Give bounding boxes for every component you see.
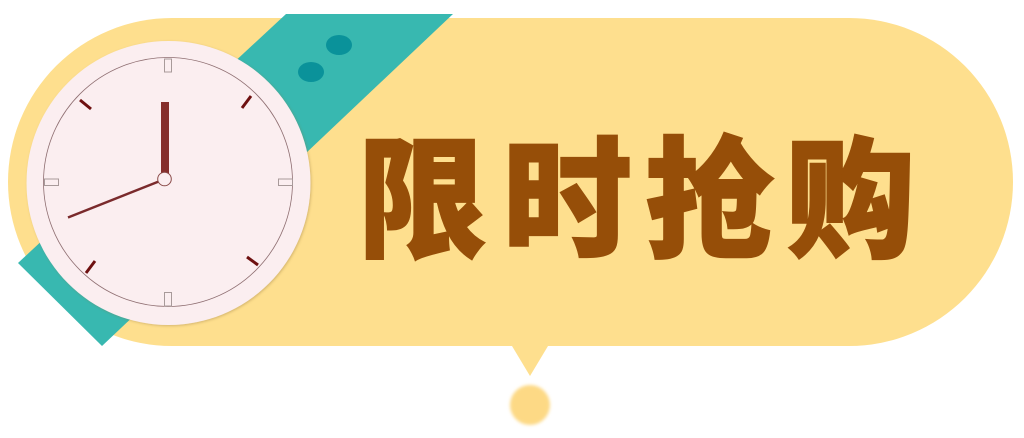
title: 限	[358, 128, 487, 275]
strap hole lower	[298, 62, 324, 82]
title: 时	[503, 128, 632, 275]
icon: clock	[26, 41, 310, 325]
strap hole upper	[326, 35, 352, 55]
clock face	[26, 41, 310, 325]
clock hub	[158, 172, 171, 186]
title: 抢	[645, 128, 774, 275]
diagonal ticks	[80, 96, 258, 273]
decorative dot	[510, 385, 550, 425]
hour ticks	[44, 59, 292, 306]
clock inner ring	[44, 58, 292, 306]
title	[358, 128, 915, 275]
hour hand	[161, 102, 169, 176]
icon: watch strap	[18, 14, 453, 346]
banner pill background	[8, 18, 1013, 346]
minute hand	[68, 181, 160, 218]
callout pointer	[512, 346, 548, 376]
title: 购	[786, 128, 915, 275]
